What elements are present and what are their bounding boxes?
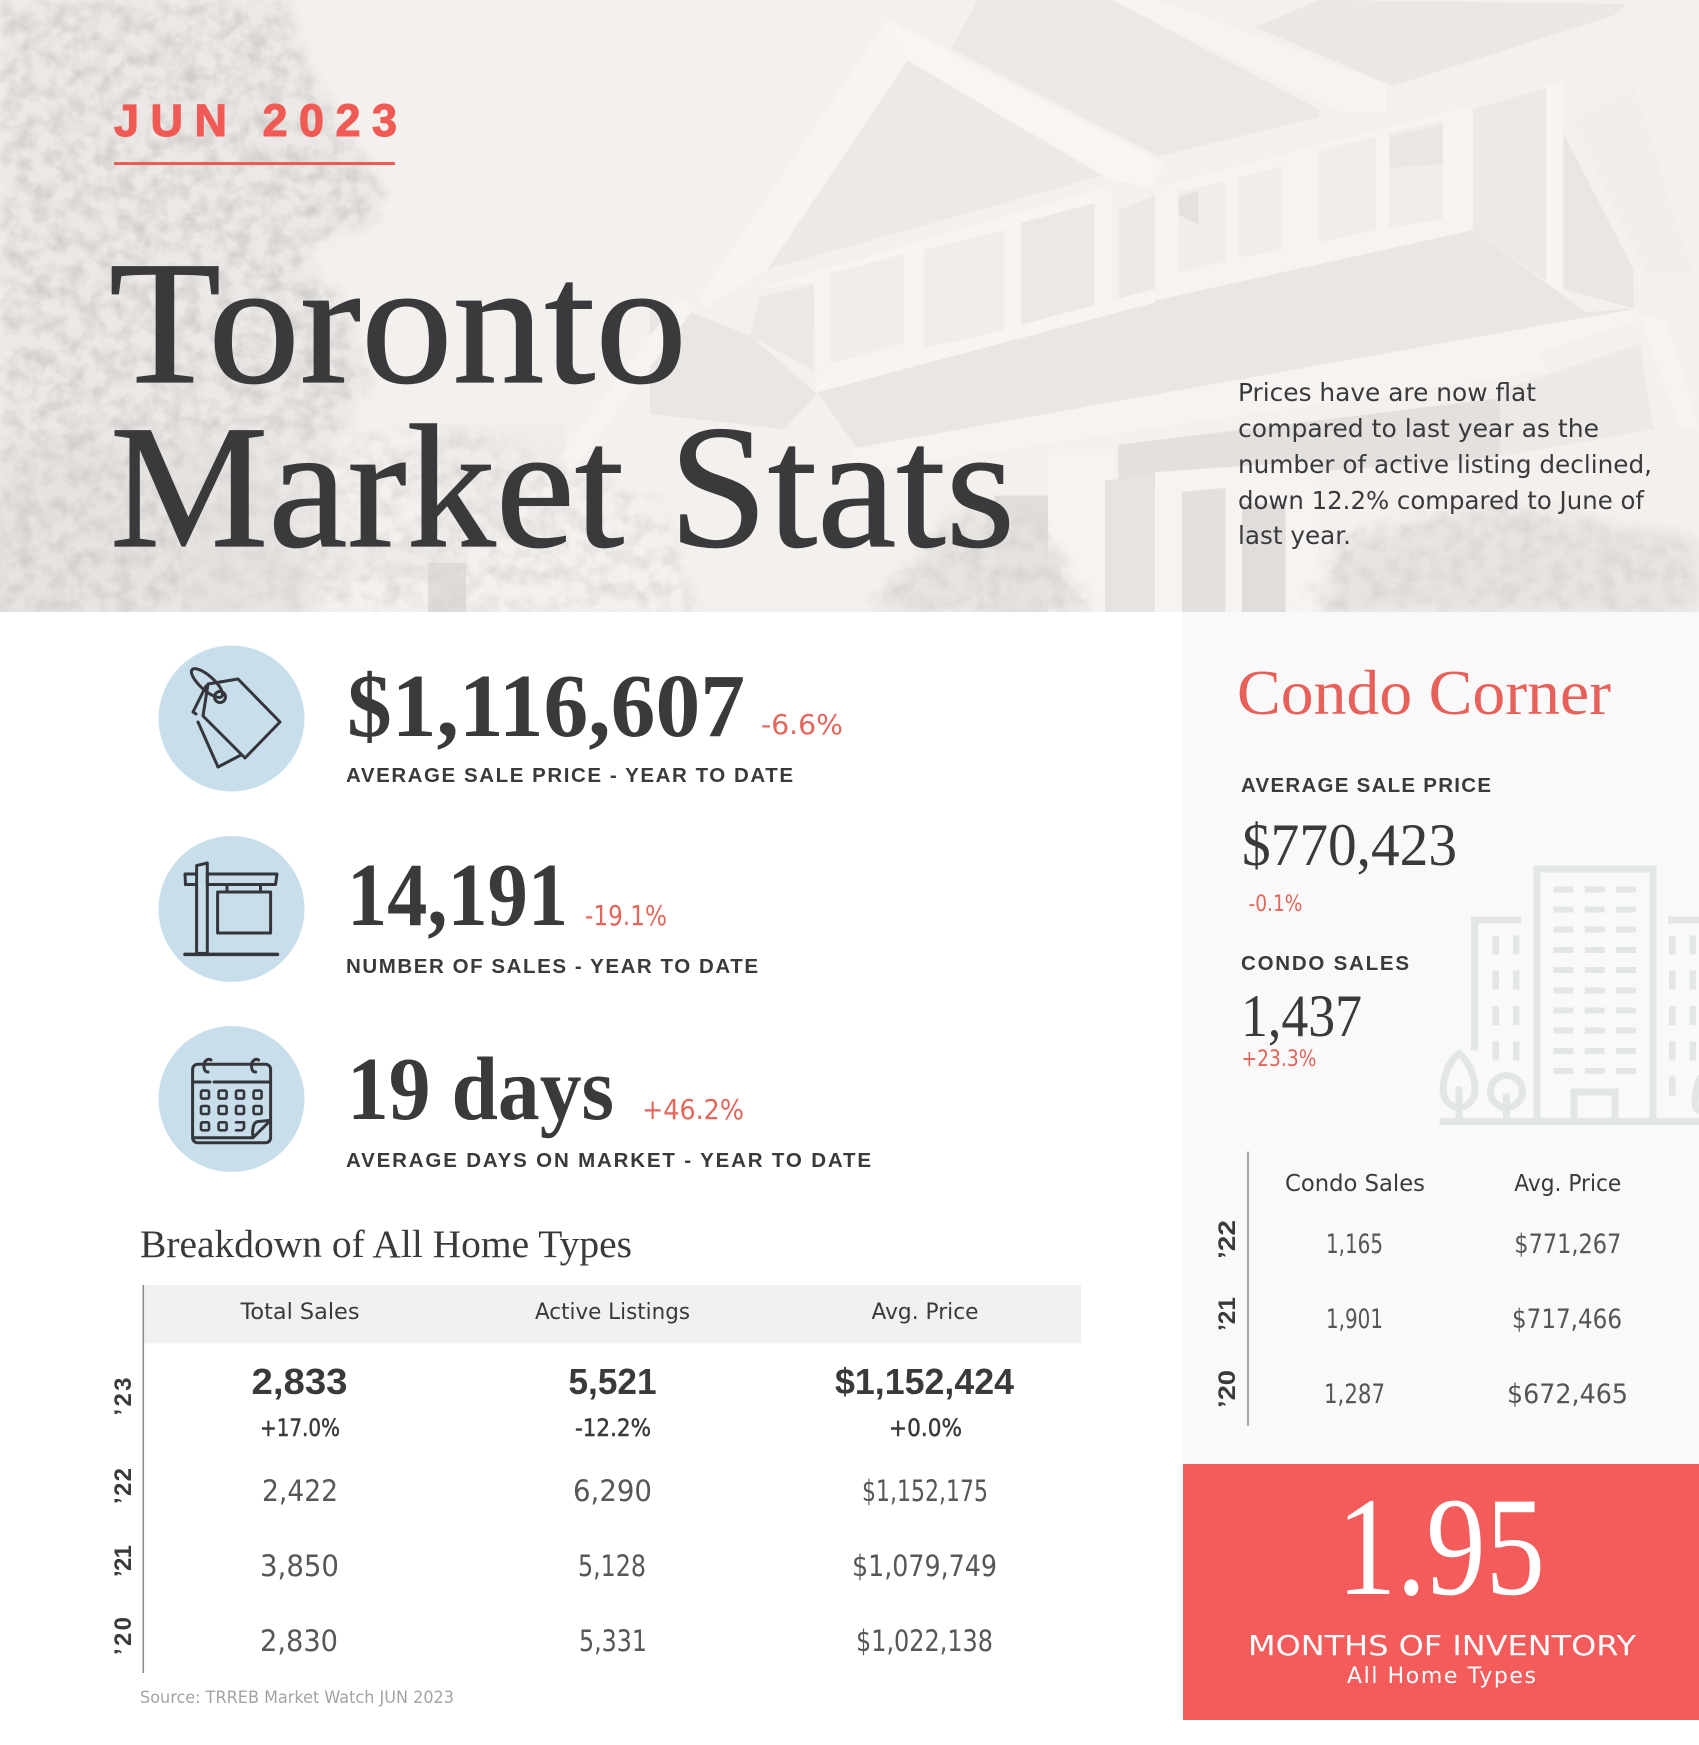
table: all home types (110, 1285, 1081, 1673)
table: all home types: 2,830 (260, 1624, 338, 1658)
stat: days on market: 19 days (347, 1040, 614, 1139)
heading: breakdown of all home types: Breakdown of All Home Types (140, 1223, 632, 1266)
table: all home types: Total Sales (239, 1300, 360, 1325)
table: all home types: ’22 (110, 1468, 137, 1504)
table: all home types: $1,079,749 (852, 1549, 997, 1583)
icon: for sale sign (158, 836, 304, 982)
table: all home types: 2,422 (262, 1474, 338, 1508)
table: all home types: -12.2% (575, 1414, 651, 1442)
date heading: JUN 2023 (114, 95, 397, 146)
stat: days on market (346, 1040, 871, 1172)
stat: condo sales: CONDO SALES (1241, 952, 1409, 975)
stat: condo average sale price: AVERAGE SALE PRICE (1241, 774, 1491, 797)
stat: average sale price: AVERAGE SALE PRICE - YEAR TO DATE (346, 764, 793, 787)
foliage base tone (9, 9, 375, 535)
stat: number of sales: NUMBER OF SALES - YEAR TO DATE (346, 955, 758, 978)
table: condo history: ’20 (1214, 1370, 1241, 1408)
table: all home types: 5,128 (578, 1549, 646, 1583)
panel: months of inventory: MONTHS OF INVENTORY (1248, 1629, 1637, 1662)
table: all home types: ’21 (110, 1545, 137, 1577)
intro paragraph: Prices have are now flat (1238, 378, 1536, 407)
stat: condo sales (1241, 952, 1409, 1072)
panel: months of inventory: 1.95 (1337, 1469, 1545, 1625)
table: all home types: $1,022,138 (856, 1624, 993, 1658)
stat: condo sales: +23.3% (1242, 1047, 1316, 1072)
panel: condo corner background (1182, 612, 1699, 1464)
stat: number of sales (346, 846, 758, 978)
table: all home types: 5,331 (579, 1624, 647, 1658)
table: condo history: ’22 (1214, 1220, 1241, 1259)
panel: months of inventory (1183, 1464, 1699, 1720)
stat: days on market: AVERAGE DAYS ON MARKET - YEAR TO DATE (346, 1149, 871, 1172)
table: all home types: $1,152,175 (862, 1474, 988, 1508)
heading: condo corner: Condo Corner (1237, 657, 1611, 728)
table: condo history: 1,901 (1326, 1304, 1383, 1335)
stat: condo average sale price (1241, 774, 1491, 917)
table: all home types: Avg. Price (872, 1300, 978, 1325)
table: condo history: ’21 (1214, 1297, 1241, 1331)
stat: number of sales: 14,191 (347, 846, 568, 945)
panel: hero background with faded house photo (0, 0, 1699, 612)
stat: condo average sale price: $770,423 (1242, 812, 1457, 878)
table: all home types: $1,152,424 (835, 1361, 1014, 1402)
intro paragraph: down 12.2% compared to June of (1238, 486, 1645, 515)
date underline (114, 162, 395, 165)
table: condo history: $672,465 (1507, 1379, 1628, 1410)
table: condo history: $771,267 (1514, 1229, 1621, 1260)
table: all home types: 5,521 (568, 1361, 656, 1402)
stat: days on market: +46.2% (642, 1093, 744, 1126)
table: all home types: +17.0% (260, 1414, 340, 1442)
stat: number of sales: -19.1% (585, 899, 667, 932)
title (109, 226, 1015, 585)
panel: months of inventory: All Home Types (1347, 1664, 1536, 1689)
table: condo history: 1,165 (1326, 1229, 1383, 1260)
intro paragraph: last year. (1238, 521, 1351, 550)
stat: condo average sale price: -0.1% (1248, 892, 1302, 917)
table: all home types: 2,833 (252, 1361, 348, 1402)
table: all home types: ’23 (110, 1378, 137, 1416)
intro paragraph (1238, 378, 1652, 550)
title: Toronto (109, 226, 687, 421)
source note: Source: TRREB Market Watch JUN 2023 (140, 1688, 454, 1708)
table: condo history: $717,466 (1512, 1304, 1622, 1335)
intro paragraph: compared to last year as the (1238, 414, 1599, 443)
table: all home types: 6,290 (573, 1474, 652, 1508)
table: all home types: +0.0% (889, 1414, 962, 1442)
stat: condo sales: 1,437 (1241, 983, 1362, 1049)
table: condo history: Condo Sales (1285, 1171, 1425, 1197)
table: condo history: 1,287 (1324, 1379, 1385, 1410)
stat: average sale price: $1,116,607 (347, 657, 745, 756)
table: all home types: Active Listings (535, 1300, 690, 1325)
table: condo history: Avg. Price (1514, 1171, 1621, 1197)
title: Market Stats (110, 390, 1015, 585)
icon: condo buildings (1440, 869, 1699, 1122)
stat: average sale price (346, 657, 843, 787)
table: all home types: ’20 (110, 1617, 137, 1655)
small neighbouring house (0, 300, 697, 612)
icon: calendar (158, 1026, 304, 1172)
table: all home types: 3,850 (260, 1549, 339, 1583)
intro paragraph: number of active listing declined, (1238, 450, 1652, 479)
table: condo history (1214, 1152, 1628, 1426)
stat: average sale price: -6.6% (761, 708, 843, 741)
icon: price tags (158, 646, 304, 792)
